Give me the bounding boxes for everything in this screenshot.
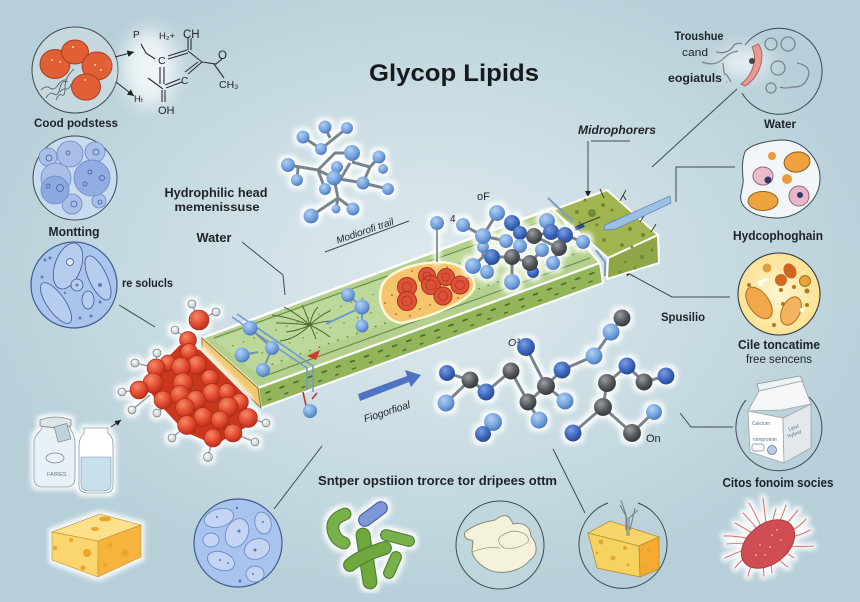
labels on protein cluster bbox=[450, 191, 490, 225]
yellow end face bbox=[202, 338, 261, 408]
illustration: white curd in circle bbox=[456, 501, 544, 589]
fan of lipid strokes bbox=[272, 305, 332, 341]
arrow: blue flow arrow bbox=[358, 370, 421, 401]
dark channel bbox=[575, 225, 584, 229]
channel bracket bbox=[548, 198, 605, 276]
icon: cheese wedge bbox=[52, 514, 141, 577]
panel: food particles circle bbox=[32, 27, 118, 113]
icon: milk jars bbox=[34, 417, 113, 493]
icon: green bacteria bbox=[333, 508, 409, 582]
label: Troushue cand eogiatuls: cand bbox=[682, 47, 708, 59]
label: Water (right): Water bbox=[764, 119, 797, 131]
panel: milk carton circle: Lipid bbox=[788, 424, 800, 433]
membrane top specks bbox=[232, 228, 582, 368]
chemical structure: OH bbox=[158, 105, 175, 117]
lower molecule right bbox=[564, 358, 674, 442]
membrane bar bbox=[202, 189, 671, 418]
chemical structure: H₂+ bbox=[159, 31, 176, 42]
chemical structure: P bbox=[133, 30, 140, 41]
jar left: FAIRES bbox=[47, 472, 67, 478]
illustration: cheese in circle bbox=[579, 500, 667, 588]
left small molecule bbox=[234, 320, 279, 377]
panel: milk carton circle: Calcium bbox=[752, 421, 770, 427]
panel: white cell blob bbox=[741, 140, 820, 218]
title: Glycop Lipids bbox=[369, 60, 539, 87]
membrane flecks bbox=[266, 272, 598, 400]
panel: milk carton circle bbox=[736, 376, 822, 471]
label: Troushue cand eogiatuls: eogiatuls bbox=[668, 71, 722, 85]
label: Cile toncatime free sencens bbox=[738, 338, 820, 366]
label: Midrophorers: Midrophorers bbox=[578, 123, 656, 137]
chemical structure: C bbox=[181, 76, 188, 87]
labels on protein cluster: 4 bbox=[450, 214, 456, 225]
label: Montting: Montting bbox=[48, 225, 100, 239]
membrane top surface bbox=[202, 208, 600, 388]
label: Hydrophilic head: memenissuse bbox=[174, 200, 260, 214]
membrane inner edge bbox=[214, 216, 590, 377]
membrane inner strip bbox=[214, 216, 585, 372]
central protein cluster bbox=[430, 205, 590, 290]
label: Hydrophilic head: Hydrophilic head bbox=[164, 186, 268, 200]
panel: milk carton circle: nonprotein bbox=[753, 437, 777, 443]
label: Cood podstess: Cood podstess bbox=[34, 116, 118, 130]
chemical structure: C bbox=[158, 55, 166, 67]
icon: red bacterium bbox=[724, 498, 813, 578]
label: Modiorofi trail: Modiorofi trail bbox=[335, 216, 396, 247]
cluster base fill bbox=[145, 345, 250, 445]
label: Cile toncatime free sencens: Cile toncatime bbox=[738, 338, 820, 352]
panel: blue organelle circle bbox=[31, 239, 117, 328]
red molecule cluster bbox=[118, 300, 270, 462]
chemical structure: Hₜ bbox=[134, 94, 144, 105]
chemical structure: O bbox=[218, 50, 227, 62]
label: Troushue cand eogiatuls: Troushue bbox=[674, 31, 724, 43]
membrane front face bbox=[258, 263, 603, 408]
label: Fiogorfioal: Fiogorfioal bbox=[362, 399, 412, 425]
jar right bbox=[79, 428, 113, 493]
blue channel tube bbox=[604, 196, 671, 230]
label: On: On bbox=[646, 433, 661, 445]
arrow: jar to molecule bbox=[111, 420, 121, 427]
label: Troushue cand eogiatuls bbox=[668, 31, 724, 85]
label: Cile toncatime free sencens: free sencens bbox=[746, 354, 812, 366]
chemical structure: CH bbox=[183, 29, 200, 41]
label: Water (left): Water bbox=[196, 231, 232, 245]
panel: milk carton circle: Hybrid bbox=[787, 429, 802, 440]
chemical structure bbox=[115, 29, 238, 117]
panel: blue cells circle bbox=[33, 136, 117, 220]
lower molecule left bbox=[438, 310, 630, 442]
green end block bbox=[553, 189, 659, 279]
top right bacterium circle bbox=[702, 28, 822, 114]
mid small molecule bbox=[326, 288, 370, 332]
panel: yellow vesicle circle bbox=[738, 253, 820, 335]
label: Hydrophilic head bbox=[164, 186, 268, 214]
label: re solucls: re solucls bbox=[122, 278, 173, 290]
label: O3: O³ bbox=[508, 337, 520, 349]
yellow patch with red cells bbox=[380, 262, 474, 323]
label: Hydcophoghain: Hydcophoghain bbox=[733, 229, 823, 243]
label: Spusilio: Spusilio bbox=[661, 310, 705, 324]
panel: blue cell circle bbox=[194, 499, 282, 587]
top blue molecule bbox=[281, 120, 394, 224]
labels on protein cluster: oF bbox=[477, 191, 490, 203]
label: Sntper opstiion trorce tor dripees ottm: Sntper opstiion trorce tor dripees ottm bbox=[318, 473, 557, 488]
label: Citos fonoim socies: Citos fonoim socies bbox=[722, 476, 834, 490]
leader lines bbox=[119, 89, 737, 513]
chemical structure: CH₃ bbox=[219, 79, 238, 91]
lipid rod with head bbox=[232, 314, 320, 418]
